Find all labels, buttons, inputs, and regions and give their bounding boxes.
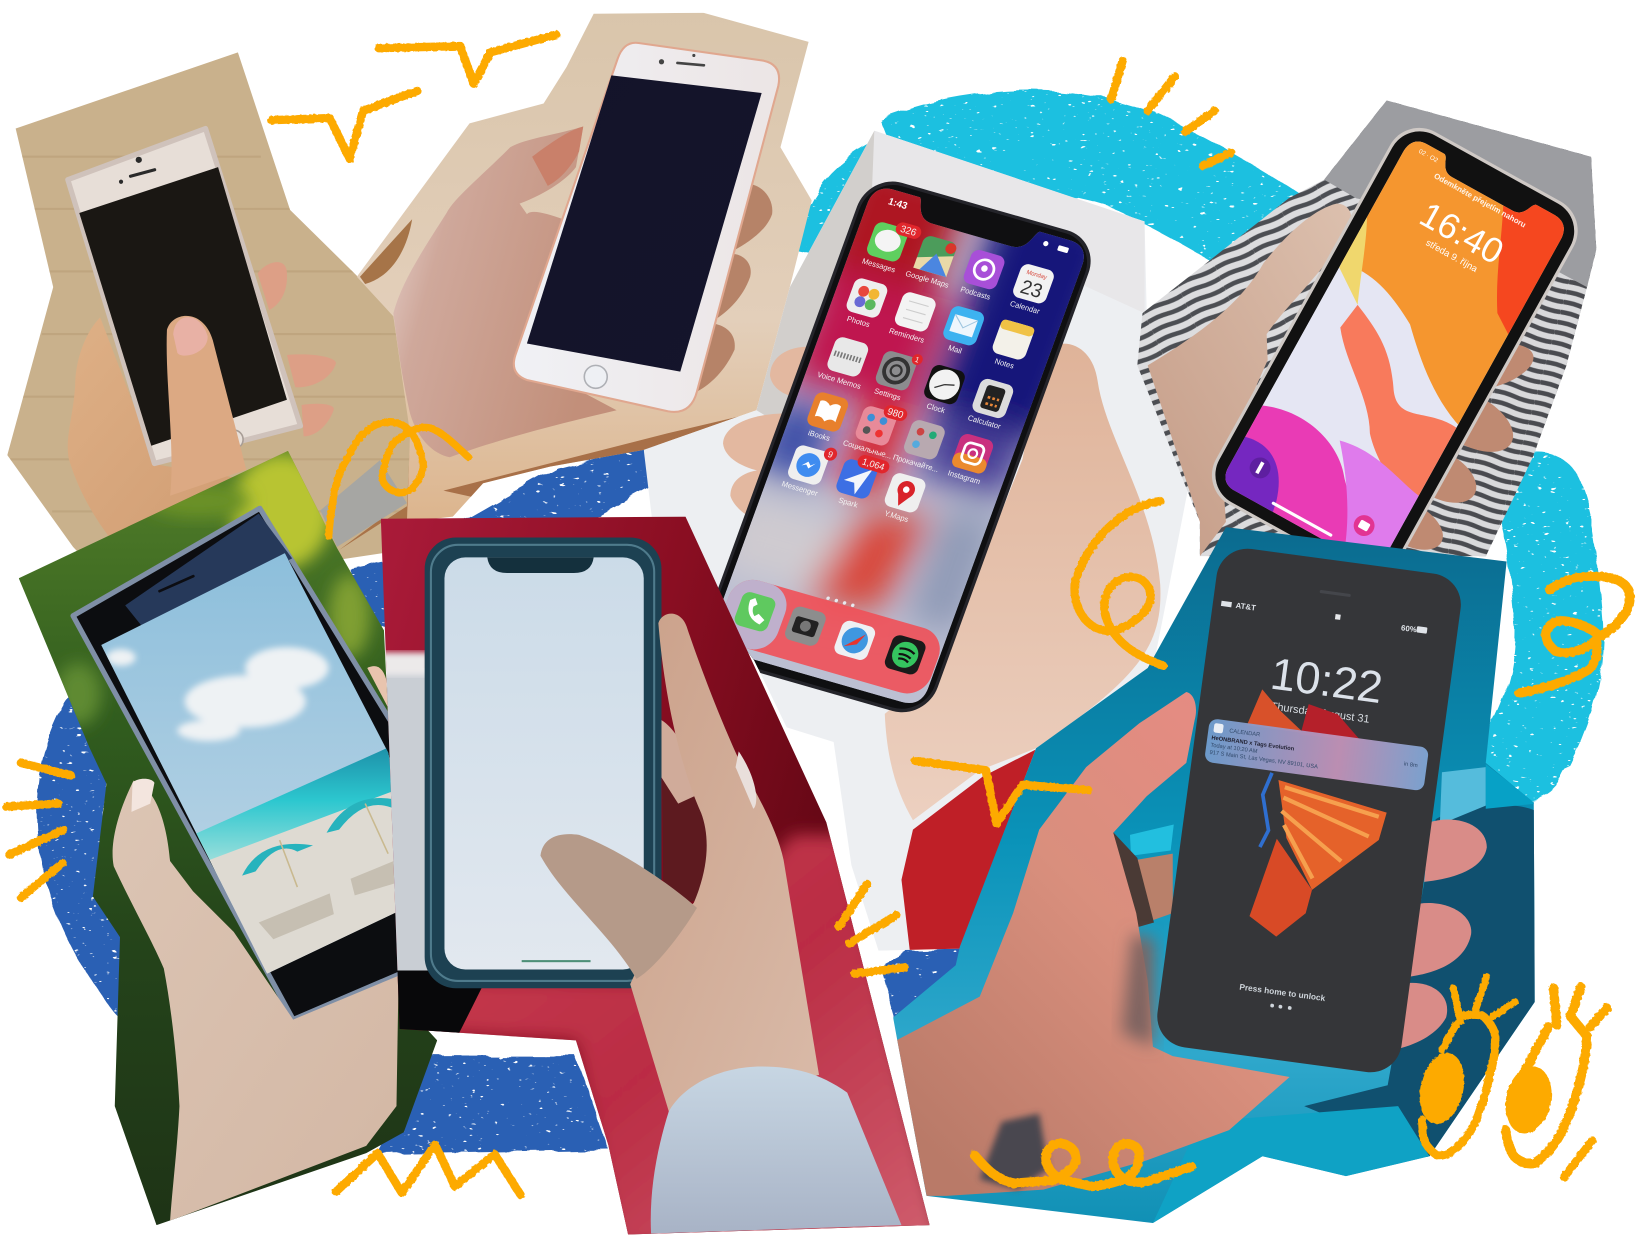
photo 5: iPhone with beach wallpaper on green background bbox=[0, 438, 449, 1231]
status bar bbox=[1221, 599, 1428, 636]
lock icon bbox=[1335, 614, 1341, 620]
notification: Today at 10:20 AM bbox=[1210, 743, 1258, 755]
dock icons bbox=[732, 590, 928, 676]
status bar: 1:43 bbox=[886, 196, 909, 212]
phone body bbox=[1153, 545, 1465, 1076]
thumbnail bbox=[131, 779, 154, 812]
thumb bbox=[540, 834, 697, 979]
photo 4: iPhone 11 lock screen on striped fabric bbox=[1137, 100, 1596, 556]
doodle: left dashes bbox=[6, 763, 71, 897]
phone body bbox=[1212, 128, 1578, 550]
app icons: 9 bbox=[826, 449, 835, 460]
back fingers bbox=[1408, 345, 1534, 550]
phone body bbox=[68, 129, 300, 463]
dark crease beside tucked finger bbox=[1106, 824, 1154, 929]
navy top bezel bbox=[125, 514, 292, 631]
app icons: Прокачайте... bbox=[892, 453, 940, 474]
hand bbox=[896, 692, 1290, 1196]
notification: in 8m bbox=[1403, 761, 1418, 769]
home indicator bbox=[522, 960, 591, 962]
lower pink area bbox=[433, 835, 944, 1242]
app icons bbox=[782, 222, 1054, 522]
dock bbox=[726, 580, 940, 694]
doodle: dash lower right bbox=[1564, 1141, 1592, 1177]
palm bbox=[68, 318, 232, 536]
lock screen text: středa 9. října bbox=[1424, 237, 1480, 274]
date: Thursday, August 31 bbox=[1270, 701, 1370, 726]
screen bbox=[724, 188, 1084, 703]
photo 7: iPhone lock screen 10:22 on teal background bbox=[887, 522, 1544, 1231]
phone body bbox=[514, 43, 779, 412]
app icons: 980 bbox=[886, 406, 905, 421]
doodle: check mark 1 bbox=[271, 91, 417, 159]
left fingers bbox=[723, 347, 807, 520]
back fingers bbox=[1398, 820, 1487, 1049]
app icons: Y.Maps bbox=[883, 509, 910, 524]
index finger shading bbox=[532, 126, 583, 186]
app icons: Podcasts bbox=[959, 285, 992, 302]
doodle: right eye bbox=[1500, 987, 1607, 1164]
earpiece and camera bbox=[119, 157, 157, 184]
app icons: Социальные... bbox=[842, 438, 893, 461]
flashlight and camera buttons bbox=[1250, 458, 1374, 536]
app icons: 1,064 bbox=[861, 457, 886, 472]
index finger and hand bbox=[630, 614, 819, 1111]
cloud bbox=[106, 647, 329, 741]
back finger shadow bbox=[661, 731, 720, 908]
app icons: 1 bbox=[914, 355, 921, 365]
sand bbox=[207, 788, 402, 976]
app icons: Mail bbox=[947, 343, 963, 356]
lock screen text: 02 · O2 bbox=[1417, 148, 1439, 165]
earpiece and camera bbox=[659, 54, 705, 67]
right fingers bbox=[693, 184, 772, 394]
app icons: Spark bbox=[837, 496, 859, 510]
hand bbox=[885, 344, 1160, 820]
back fingers bbox=[258, 262, 336, 436]
app icons: 23 bbox=[1017, 276, 1046, 303]
doodle: left eye bbox=[1414, 977, 1515, 1156]
doodle: loop bbox=[329, 422, 468, 536]
notch bbox=[487, 557, 594, 573]
phone screen bbox=[444, 557, 644, 969]
doodle: check mark 2 bbox=[379, 35, 556, 84]
clock: 10:22 bbox=[1268, 648, 1386, 713]
phone body bbox=[425, 538, 661, 988]
notification: 917 S Main St, Las Vegas, NV 89101, USA bbox=[1209, 750, 1318, 771]
brown wood strip bbox=[340, 466, 409, 550]
app icons: Monday bbox=[1025, 270, 1048, 281]
thumbnail bbox=[173, 317, 208, 356]
speaker bbox=[1320, 590, 1351, 597]
home indicator bbox=[1271, 501, 1333, 537]
blurred white object bbox=[378, 668, 442, 977]
app icons: Clock bbox=[925, 401, 947, 415]
status bar: AT&T bbox=[1235, 601, 1257, 613]
app icons: iBooks bbox=[807, 428, 832, 443]
phone screen bbox=[79, 167, 287, 446]
tucked finger bbox=[1136, 854, 1173, 920]
red shirt bbox=[901, 749, 1036, 951]
doodle: right spiral bbox=[1519, 576, 1630, 693]
notification bbox=[1204, 718, 1429, 791]
photo 2: rose-gold iPhone held in hand bbox=[355, 11, 819, 527]
page dots bbox=[826, 596, 855, 607]
app icons: Voice Memos bbox=[816, 370, 863, 391]
doodle: centre dashes bbox=[839, 884, 905, 974]
doodle: spiral in centre bbox=[1075, 501, 1163, 666]
hand bbox=[113, 781, 399, 1221]
hand shadow bbox=[980, 1113, 1049, 1190]
app icons: Calculator bbox=[966, 413, 1002, 431]
umbrellas and deck chairs bbox=[242, 798, 396, 939]
phone body bbox=[73, 508, 403, 1020]
sea bbox=[193, 746, 402, 882]
lock screen text: Odemkněte přejetím nahoru bbox=[1432, 171, 1528, 230]
app icons: 326 bbox=[899, 224, 918, 239]
photo 3: iPhone X home screen on white table bbox=[636, 125, 1205, 960]
app icons: Google Maps bbox=[904, 269, 950, 290]
phone body bbox=[718, 182, 1091, 712]
bright patches bbox=[1440, 767, 1486, 824]
doodle: bottom curl bbox=[975, 1143, 1192, 1187]
lock screen text bbox=[1419, 149, 1526, 272]
app icons: Messenger bbox=[780, 479, 820, 498]
hand bbox=[1148, 204, 1351, 556]
betta fish wallpaper bbox=[1219, 688, 1401, 949]
press home to unlock: Press home to unlock bbox=[1239, 982, 1326, 1003]
earpiece bbox=[158, 574, 195, 593]
doodle: top dashes bbox=[1111, 61, 1231, 166]
hand palm and thumb bbox=[393, 126, 617, 457]
dark lower right bbox=[1304, 805, 1539, 1158]
screen wallpaper bbox=[1226, 142, 1564, 548]
notification: CALENDAR bbox=[1229, 728, 1260, 738]
doodle: check mark 3 bbox=[915, 761, 1088, 823]
black bottom-left object bbox=[391, 971, 490, 1033]
app icons: Instagram bbox=[947, 468, 982, 486]
app icons: Photos bbox=[846, 314, 871, 329]
notification: HeONBRAND x Tags Evolution bbox=[1211, 735, 1295, 753]
app icons: Messages bbox=[861, 256, 897, 274]
app icons: Settings bbox=[873, 386, 902, 402]
phone screen bbox=[527, 75, 762, 372]
home button bbox=[584, 365, 607, 388]
photo 1: iPhone SE on wooden table bbox=[7, 52, 410, 559]
stone on table bbox=[320, 460, 407, 547]
sleeve bbox=[651, 1067, 901, 1233]
app icons: Calendar bbox=[1009, 299, 1041, 316]
page dots bbox=[1270, 1003, 1292, 1010]
doodle: bottom zigzag bbox=[336, 1145, 521, 1195]
app icons: Reminders bbox=[888, 326, 926, 345]
screen bbox=[94, 543, 407, 981]
status bar: 60% bbox=[1401, 623, 1417, 634]
status bar bbox=[888, 198, 1069, 253]
cyan and blue brush strokes bbox=[71, 142, 1559, 1154]
app icons: Notes bbox=[993, 357, 1016, 371]
photo 6: phone with white screen on red background bbox=[376, 511, 944, 1242]
lock screen text: 16:40 bbox=[1413, 194, 1510, 272]
home button bbox=[236, 430, 244, 447]
thumb bbox=[167, 316, 246, 496]
